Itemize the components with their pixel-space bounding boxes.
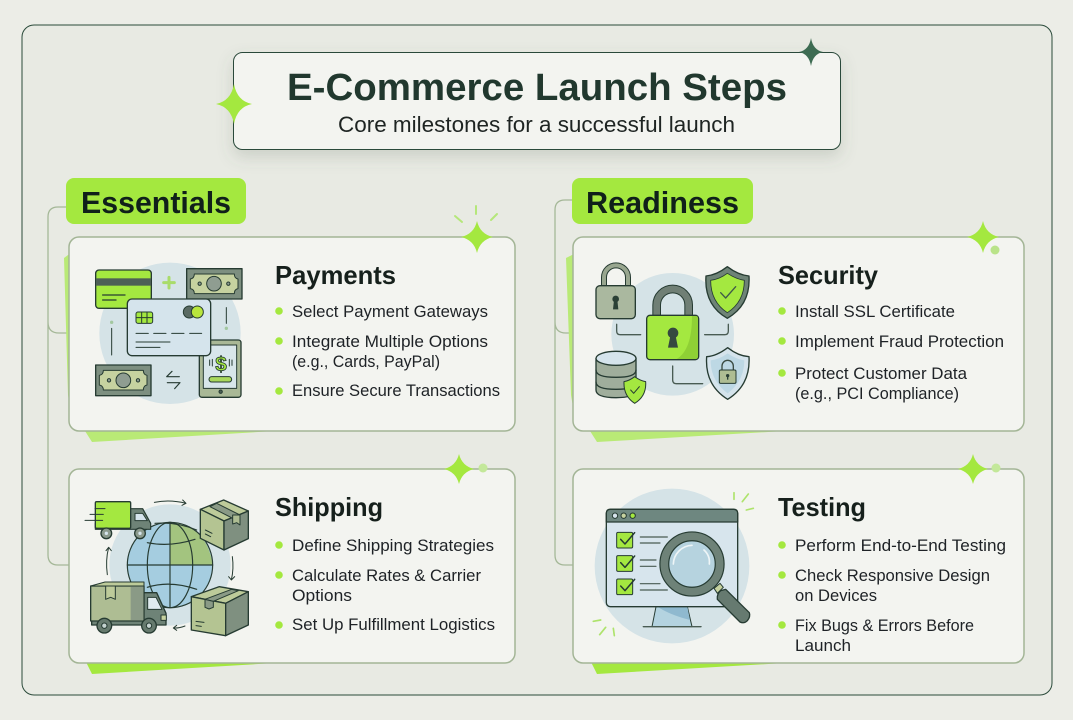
- list: [778, 303, 1004, 403]
- list: Fix Bugs & Errors Before: [795, 617, 974, 635]
- list: on Devices: [795, 587, 877, 605]
- connector: essentials: [48, 207, 69, 565]
- heading: Shipping: [275, 492, 383, 522]
- icon: security: [596, 265, 749, 403]
- panel: payments: [64, 206, 515, 442]
- heading: Payments: [275, 260, 396, 290]
- list: Implement Fraud Protection: [795, 333, 1004, 351]
- connector: readiness: [555, 200, 573, 565]
- icon: sparkle: [967, 221, 1000, 254]
- panel: testing: [573, 454, 1024, 674]
- list: Set Up Fulfillment Logistics: [292, 616, 495, 634]
- icon: dark sparkle: [799, 38, 823, 66]
- heading: Essentials: [66, 178, 246, 224]
- list: (e.g., PCI Compliance): [795, 385, 959, 403]
- list: Install SSL Certificate: [795, 303, 955, 321]
- list: Protect Customer Data: [795, 365, 968, 383]
- heading: Readiness: Readiness: [586, 185, 739, 220]
- list: [275, 303, 500, 400]
- list: (e.g., Cards, PayPal): [292, 353, 440, 371]
- list: Calculate Rates & Carrier: [292, 567, 481, 585]
- panel: shipping: [69, 454, 515, 674]
- heading: Essentials: Essentials: [81, 185, 231, 220]
- list: Launch: [795, 637, 851, 655]
- list: [275, 537, 495, 634]
- heading: Security: [778, 260, 879, 290]
- icon: payments: $: [215, 353, 227, 376]
- list: Define Shipping Strategies: [292, 537, 494, 555]
- icon: lime sparkle: [216, 84, 252, 124]
- list: Integrate Multiple Options: [292, 333, 488, 351]
- heading: Testing: [778, 492, 866, 522]
- panel: security: [566, 221, 1024, 442]
- icon: shipping: [85, 500, 248, 636]
- icon: sparkle: [958, 454, 1000, 484]
- list: Check Responsive Design: [795, 567, 990, 585]
- heading: Readiness: [572, 178, 753, 224]
- icon: payments: [96, 263, 242, 404]
- icon: sparkle: [455, 206, 497, 253]
- list: Perform End-to-End Testing: [795, 537, 1006, 555]
- icon: sparkle: [444, 454, 488, 484]
- icon: testing: [593, 489, 753, 643]
- list: [778, 537, 1006, 655]
- subtitle: Core milestones for a successful launch: [338, 112, 735, 137]
- title: E-Commerce Launch Steps: [287, 67, 787, 109]
- list: Options: [292, 587, 352, 605]
- title box: [216, 38, 840, 150]
- list: Select Payment Gateways: [292, 303, 488, 321]
- list: Ensure Secure Transactions: [292, 382, 500, 400]
